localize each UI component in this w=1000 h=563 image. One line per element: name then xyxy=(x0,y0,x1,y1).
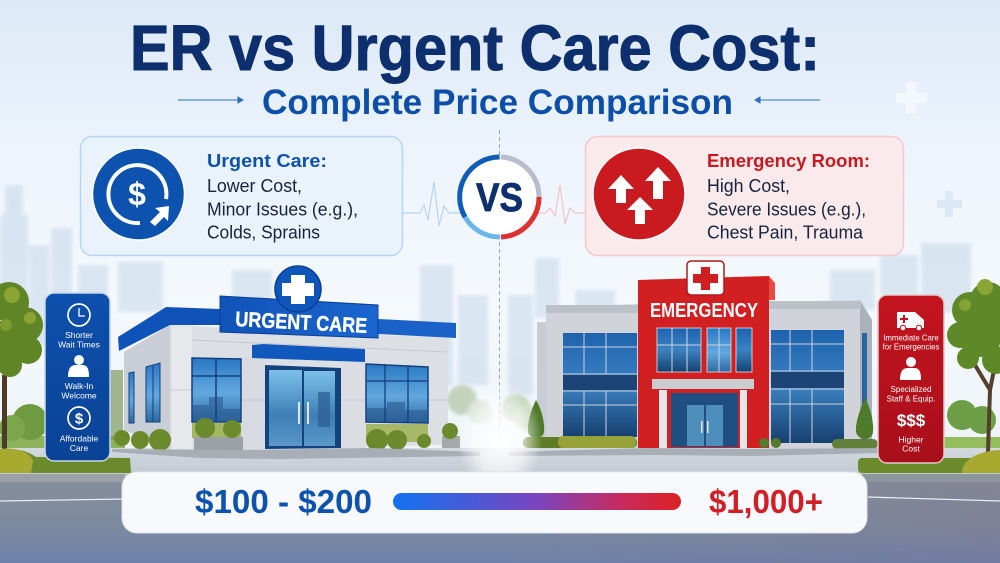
decorative cross right xyxy=(937,191,962,217)
card: emergency room xyxy=(586,136,904,256)
roof xyxy=(118,307,220,351)
label: walk-in welcome: Welcome xyxy=(61,390,97,400)
price: urgent care: $100 - $200 xyxy=(195,483,372,520)
label: higher cost: Cost xyxy=(902,444,920,454)
canopy and columns xyxy=(652,379,754,389)
cost gradient bar xyxy=(393,493,681,510)
front steps xyxy=(508,448,880,456)
sign board xyxy=(220,296,378,338)
center light glow xyxy=(458,380,542,500)
center divider xyxy=(498,130,500,455)
entrance door xyxy=(671,393,738,447)
icon: doctor xyxy=(900,357,921,380)
emergency sign plate xyxy=(687,261,724,295)
subtitle: Complete Price Comparison xyxy=(262,83,733,122)
icon: dollar circle: $ xyxy=(75,410,84,428)
sign text: URGENT CARE xyxy=(235,308,368,338)
card text: Colds, Sprains xyxy=(207,222,320,242)
price: emergency room: $1,000+ xyxy=(709,483,823,520)
icon: dollar signs: $$$ xyxy=(897,411,926,430)
label: immediate care: for Emergencies xyxy=(883,342,939,352)
skyline left xyxy=(0,185,488,385)
cypress and shrubs xyxy=(528,400,544,438)
urgent care building xyxy=(112,266,480,459)
right subtitle arrow xyxy=(755,97,820,103)
emergency text: EMERGENCY xyxy=(650,300,759,322)
vs badge: VS xyxy=(476,176,523,220)
right hedge and curb xyxy=(858,450,1000,482)
pavement xyxy=(0,448,1000,482)
heartbeat left xyxy=(403,182,462,226)
card text xyxy=(207,176,358,242)
card heading: Emergency Room: xyxy=(707,151,870,171)
pylon: emergency benefits xyxy=(878,295,944,463)
wing windows xyxy=(563,333,637,437)
card text: High Cost, xyxy=(707,176,790,196)
label: affordable care: Affordable xyxy=(60,434,99,444)
card text xyxy=(707,176,866,242)
icon: clock xyxy=(68,304,90,326)
skyline right xyxy=(508,243,971,395)
sign cross badge xyxy=(275,266,321,312)
decorative cross top right xyxy=(896,82,927,114)
walls xyxy=(124,325,170,450)
pylon: urgent care benefits xyxy=(45,293,110,461)
red tower xyxy=(769,276,775,300)
label: higher cost: Higher xyxy=(898,434,924,444)
tower windows xyxy=(657,328,701,372)
green window base xyxy=(192,423,241,438)
icon: dollar with arrow: $ xyxy=(128,176,146,212)
road xyxy=(0,482,1000,563)
left tree xyxy=(0,282,43,453)
awning xyxy=(252,344,365,362)
left hedge and curb xyxy=(0,448,131,482)
left subtitle arrow xyxy=(178,97,243,103)
heartbeat right xyxy=(537,185,586,224)
right tree xyxy=(947,279,1000,452)
label: specialized staff: Staff & Equip. xyxy=(887,394,935,404)
label: specialized staff: Specialized xyxy=(891,385,931,394)
icon: rising arrows xyxy=(593,148,685,240)
card text: Lower Cost, xyxy=(207,176,302,196)
card: urgent care xyxy=(80,136,402,256)
icon: person xyxy=(68,355,89,377)
label: immediate care: Immediate Care xyxy=(883,334,939,342)
price comparison bar xyxy=(122,472,867,533)
label: shorter wait times: Wait Times xyxy=(58,340,100,350)
icon: ambulance xyxy=(897,312,924,331)
label: shorter wait times: Shorter xyxy=(65,330,93,340)
emergency building xyxy=(508,261,880,456)
title: ER vs Urgent Care Cost: xyxy=(130,12,820,84)
lawn and background trees xyxy=(0,370,1000,452)
icon: dollar circle xyxy=(68,407,90,429)
door xyxy=(265,365,341,449)
icon: dollar with arrow xyxy=(92,148,184,240)
windows xyxy=(192,358,241,422)
planters and shrubs xyxy=(194,437,243,451)
label: affordable care: Care xyxy=(70,443,88,453)
card text: Severe Issues (e.g.), xyxy=(707,200,866,220)
card heading: Urgent Care: xyxy=(207,151,327,171)
card text: Minor Issues (e.g.), xyxy=(207,200,358,220)
vs badge xyxy=(460,157,539,237)
front steps xyxy=(112,448,480,459)
card text: Chest Pain, Trauma xyxy=(707,222,864,242)
label: walk-in welcome: Walk-In xyxy=(65,381,94,391)
side wings xyxy=(537,322,547,444)
